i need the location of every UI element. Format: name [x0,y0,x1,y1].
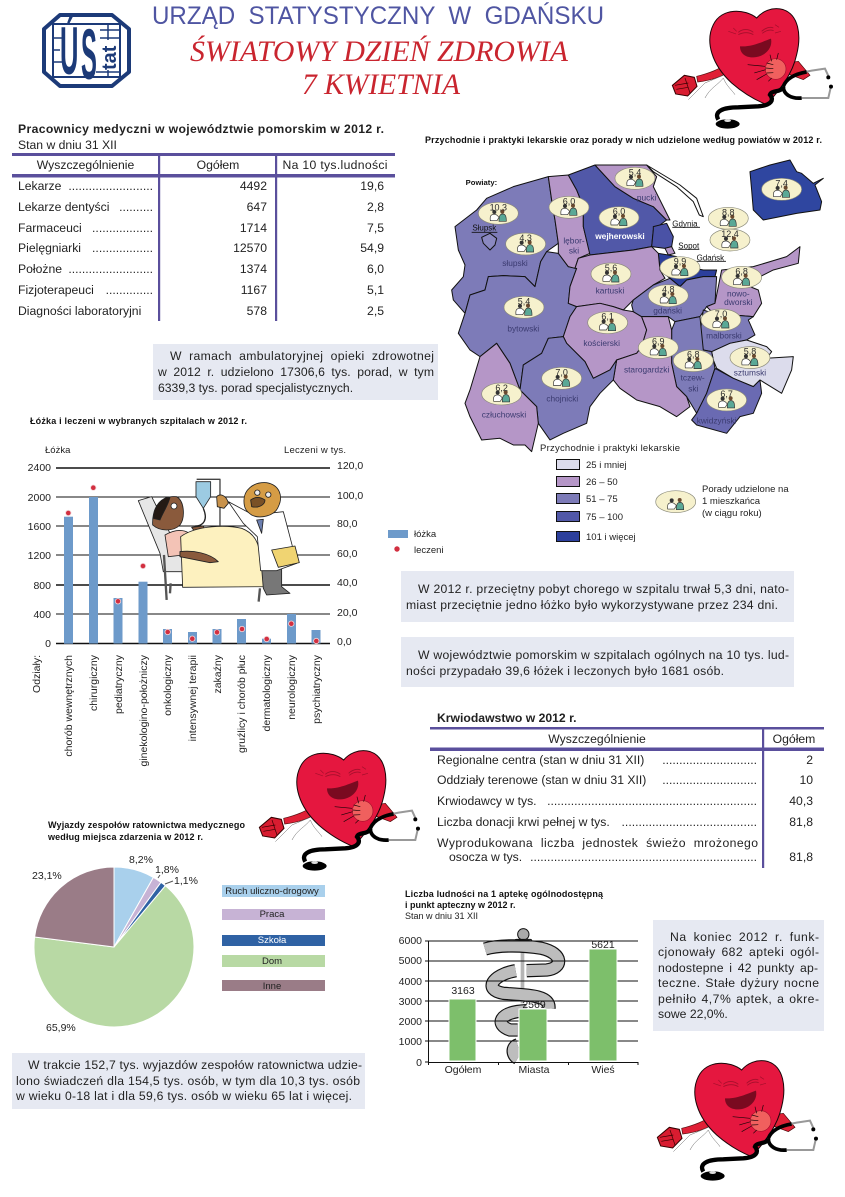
category labels: pediatryczny [113,654,125,714]
table rows: 578 [247,304,267,318]
map labels and advice ovals: 7,4 [775,178,788,188]
table rows: 4492 [240,179,267,193]
axis labels: 120,0 [337,460,363,472]
panel: blood donation table [430,711,824,868]
chart legend: łóżka [414,529,437,540]
map labels and advice ovals: 5,8 [744,347,756,357]
table rows: 40,3 [789,794,813,808]
map labels and advice ovals: pucki [637,193,657,203]
axis labels: 0 [45,638,51,650]
axis titles: Łóżka [45,445,71,456]
chart title [405,889,604,921]
chart title: według miejsca zdarzenia w 2012 r. [47,832,203,842]
logo: US Stat: Ú [60,13,78,89]
table rows: Lekarze [18,179,62,193]
axis labels: 80,0 [337,518,358,530]
map labels and advice ovals: 5,6 [605,263,617,273]
map labels and advice ovals: 5,4 [518,296,530,306]
map labels and advice ovals: sztumski [734,367,766,377]
table rows: .............. [106,283,153,297]
table rows: Diagności laboratoryjni [18,304,141,318]
callout: pharmacies: pełniło 4,7% aptek, a okre- [658,992,819,1006]
map labels and advice ovals: 7,0 [715,309,727,319]
map labels and advice ovals: 6,9 [652,337,665,347]
axis labels: 100,0 [337,490,363,502]
bars [449,949,617,1061]
chart title: i punkt apteczny w 2012 r. [405,900,516,910]
chart title: Stan w dniu 31 XII [405,911,478,921]
map title: Przychodnie i praktyki lekarskie oraz porady w nich udzielone według powiatów w 2012 r. [425,135,822,145]
callout: beds per population: ności przypadało 39,6 łóżek i leczonych było 1681 osób. [406,664,724,678]
callout: ambulatory care [153,344,438,400]
map labels and advice ovals [466,167,802,425]
table title: Pracownicy medyczni w województwie pomorskim w 2012 r. [18,122,384,136]
table rows: ......................... [68,262,153,276]
category labels [445,1064,615,1076]
illustration: doctor and patient [138,479,299,602]
map legend: 51 – 75 [586,494,618,505]
table rows: ......................... [68,179,153,193]
map labels and advice ovals: wejherowski [594,231,645,241]
table rows: osocza w tys. [449,850,522,864]
map legend: 26 – 50 [586,477,618,488]
axis labels: 3000 [399,996,422,1008]
table rows: Fizjoterapeuci [18,283,94,297]
map labels and advice ovals: człuchowski [482,409,526,419]
table subtitle: Stan w dniu 31 XII [18,138,117,152]
table rows: Położne [18,262,62,276]
callout: beds per population [401,637,794,687]
map labels and advice ovals: dworski [724,297,753,307]
map labels and advice ovals: malborski [706,330,742,340]
title: office name: URZĄD STATYSTYCZNY W GDAŃSKU [152,1,604,30]
map legend: 101 i więcej [586,532,636,543]
category labels: onkologiczny [162,654,174,716]
table rows: 12570 [233,241,267,255]
logo: US Stat [44,13,129,95]
chart title: Liczba ludności na 1 aptekę ogólnodostępną [405,889,604,899]
map legend: 75 – 100 [586,512,623,523]
chart title: Łóżka i leczeni w wybranych szpitalach w 2012 r. [30,416,247,426]
category labels: dermatologiczny [261,654,273,731]
category labels [31,654,323,766]
axis labels: 1600 [28,521,51,533]
axis labels: 0,0 [337,636,352,648]
table rows: 1374 [240,262,267,276]
table rows: .................. [92,221,153,235]
table rows [437,753,813,864]
grid lines [425,941,638,1065]
pie labels: 1,1% [174,875,198,887]
logo: US Stat: S [81,16,97,95]
category labels: Odziały: [31,655,43,693]
table rows: 7,5 [367,221,384,235]
pie legend: Dom [262,956,282,967]
chart title: Wyjazdy zespołów ratownictwa medycznego [48,820,246,830]
table rows: .............................................................. [547,794,757,808]
table rows: ........................................ [622,815,757,829]
map labels and advice ovals: gdański [653,305,682,315]
pie legend: Praca [260,909,285,920]
map legend: (w ciągu roku) [702,508,762,519]
callout: hospital stay: W 2012 r. przeciętny pobyt chorego w szpitalu trwał 5,3 dni, nato- [418,582,789,596]
axis labels: 2000 [399,1016,422,1028]
table rows: 81,8 [789,815,813,829]
table rows: 2,5 [367,304,384,318]
table rows: 5,1 [367,283,384,297]
icon: heart bottom right [657,1061,818,1181]
map labels and advice ovals: Słupsk [472,224,496,233]
axis labels: 5000 [399,955,422,967]
table header: Wyszczególnienie [37,158,134,172]
icon: heart top right [672,9,833,129]
table rows [18,179,384,318]
map labels and advice ovals: bytowski [507,323,539,333]
table rows: 81,8 [789,850,813,864]
table rows: Pielęgniarki [18,241,81,255]
map labels and advice ovals: Sopot [678,241,700,250]
callout: pharmacies: Na koniec 2012 r. funk- [670,930,819,944]
table rows: .................. [92,241,153,255]
pie labels: 1,8% [155,864,179,876]
category labels: Ogółem [445,1064,482,1076]
table rows: 647 [247,200,267,214]
table rows: Regionalne centra (stan w dniu 31 XII) [437,753,644,767]
pie labels: 23,1% [32,870,62,882]
table header: Wyszczególnienie [548,732,646,746]
panel: beds and patients chart [28,416,444,766]
category labels: Miasta [519,1064,550,1076]
bars: beds [64,497,320,644]
dots: patients [66,485,319,644]
table title: Krwiodawstwo w 2012 r. [437,711,577,725]
category labels: chorób wewnętrznych [63,655,75,757]
callout: pharmacies: nodostepne i 42 punkty ap- [658,961,818,975]
map labels and advice ovals: 10,3 [490,202,507,212]
map labels and advice ovals: 6,0 [563,196,575,206]
map labels and advice ovals: 6,7 [720,389,733,399]
map labels and advice ovals: 5,4 [629,167,641,177]
chart title [47,820,246,842]
callout: hospital stay [401,571,794,622]
axis labels: 2400 [28,462,51,474]
map labels and advice ovals: Gdynia [672,220,698,229]
category labels: neurologiczny [286,654,298,720]
value labels [451,939,615,1011]
map labels and advice ovals: 6,8 [735,266,748,276]
callout: pharmacies: cjonowały 682 apteki ogól- [658,945,819,959]
table rows: Krwiodawcy w tys. [437,794,537,808]
chart legend: leczeni [414,545,444,556]
axis labels [28,460,363,650]
table rows: 6,0 [367,262,384,276]
value labels: 2569 [522,999,546,1011]
map legend: 1 mieszkańca [702,496,761,507]
axis labels: 1000 [399,1036,422,1048]
map labels and advice ovals: kwidzyński [697,415,737,425]
category labels: psychiatryczny [311,654,323,724]
axis labels: 20,0 [337,607,358,619]
category labels: chirurgiczny [88,654,100,711]
grid lines [56,468,330,644]
map labels and advice ovals: 9,9 [674,257,686,267]
map labels and advice ovals: Powiaty: [466,178,497,187]
map labels and advice ovals: starogardzki [624,365,669,375]
panel: clinics map [425,135,823,543]
panel: pharmacy chart [399,889,638,1076]
title: date: 7 KWIETNIA [302,68,461,101]
category labels: zakaźny [212,654,224,694]
pie legend: Inne [263,981,281,992]
callout: hospital stay: miast przeciętnie jedno łóżko było wykorzystywane przez 234 dni. [406,598,778,612]
table rows: Lekarze dentyści [18,200,109,214]
axis titles: Leczeni w tys. [284,445,346,456]
map labels and advice ovals: kościerski [583,338,620,348]
value labels: 3163 [451,985,475,997]
map legend: Porady udzielone na [702,484,789,495]
map labels and advice ovals: 12,4 [721,229,739,239]
axis labels: 0 [416,1057,422,1069]
table rows: ................................................................... [530,850,757,864]
table rows: Wyprodukowana liczba jednostek świeżo mrożonego [437,836,758,850]
table rows: Liczba donacji krwi pełnej w tys. [437,815,610,829]
map of counties [452,160,823,452]
table rows: 54,9 [360,241,384,255]
map labels and advice ovals: kartuski [596,285,624,295]
callout: emergency trips: w wieku 0-18 lat i dla 59,6 tys. osób w wieku 65 lat i więcej. [15,1089,352,1103]
pie legend [222,885,325,992]
chart legend [388,529,444,556]
axis labels: 2000 [28,492,51,504]
callout: emergency trips [12,1053,365,1109]
title: World Health Day: ŚWIATOWY DZIEŃ ZDROWIA [190,35,569,68]
table rows: Farmaceuci [18,221,82,235]
table header: Na 10 tys.ludności [282,158,388,172]
value labels: 5621 [591,939,615,951]
pie labels: 65,9% [46,1022,76,1034]
map labels and advice ovals: ski [569,245,579,255]
pie [34,867,194,1027]
table rows: 2,8 [367,200,384,214]
map labels and advice ovals: 6,0 [613,207,625,217]
map labels and advice ovals: 6,1 [601,312,614,322]
table header: Ogółem [773,732,815,746]
panel: medical staff table [12,122,395,321]
axis labels [399,935,422,1069]
axis labels: 60,0 [337,548,358,560]
map labels and advice ovals: lębor- [563,235,585,245]
category labels: ginekologino-położniczy [138,654,150,766]
map labels and advice ovals: Gdańsk [697,254,724,263]
table rows: 10 [799,773,813,787]
callout: pharmacies: sowe 22,0%. [658,1007,728,1021]
category labels: intensywnej terapii [187,655,199,741]
table rows: .......... [119,200,153,214]
pie labels [32,854,198,1034]
map labels and advice ovals: słupski [502,258,528,268]
map labels and advice ovals: 8,8 [722,207,735,217]
table rows: 1167 [241,283,267,297]
map legend: Przychodnie i praktyki lekarskie [540,443,680,454]
table rows: Oddziały terenowe (stan w dniu 31 XII) [437,773,646,787]
axis labels: 4000 [399,976,422,988]
axis labels: 800 [33,580,51,592]
callout: pharmacies [653,920,824,1031]
table rows: ............................ [662,773,757,787]
table header [37,158,388,172]
pie legend: Szkoła [258,935,287,946]
callout: emergency trips: lono świadczeń dla 154,5 tys. osób, w tym dla 10,3 tys. osób [16,1074,360,1088]
category labels: Wieś [591,1064,615,1076]
illustration: rod of Asclepius [485,929,559,1058]
axis labels: 1200 [28,550,51,562]
map labels and advice ovals: 4,8 [662,285,675,295]
axis labels: 40,0 [337,577,358,589]
table header [548,732,815,746]
table rows: 2 [806,753,813,767]
callout: ambulatory care: w 2012 r. udzielono 17306,6 tys. porad, w tym [157,365,434,379]
map labels and advice ovals: tczew- [681,373,705,383]
map labels and advice ovals: ski [688,383,699,393]
callout: ambulatory care: 6339,3 tys. porad specjalistycznych. [158,381,353,395]
map legend [540,443,789,543]
pie labels: 8,2% [129,854,153,866]
callout: beds per population: W województwie pomorskim w szpitalach ogólnych na 10 tys. lud- [418,648,789,662]
table header: Ogółem [197,158,239,172]
axis labels: 400 [33,609,51,621]
map labels and advice ovals: 6,8 [687,350,700,360]
table rows: 1714 [240,221,267,235]
category labels: gruźlicy i chorób płuc [236,655,248,753]
map labels and advice ovals: 6,2 [495,383,508,393]
table rows: 19,6 [360,179,384,193]
pie legend: Ruch uliczno-drogowy [225,886,319,897]
callout: emergency trips: W trakcie 152,7 tys. wyjazdów zespołów ratownictwa udzie- [28,1058,362,1072]
panel: emergency pie chart [32,820,325,1034]
axis titles [45,445,346,456]
callout: ambulatory care: W ramach ambulatoryjnej opieki zdrowotnej [170,349,434,363]
logo: US Stat: tat [99,45,121,70]
icon: heart middle [259,751,420,871]
map labels and advice ovals: 4,3 [519,233,532,243]
map labels and advice ovals: nowo- [727,289,750,299]
map labels and advice ovals: 7,0 [555,367,568,377]
map legend: 25 i mniej [586,460,627,471]
table rows: ............................ [662,753,757,767]
axis labels: 6000 [399,935,422,947]
callout: pharmacies: teczne. Stałe dyżury nocne [658,976,819,990]
map labels and advice ovals: chojnicki [546,393,578,403]
